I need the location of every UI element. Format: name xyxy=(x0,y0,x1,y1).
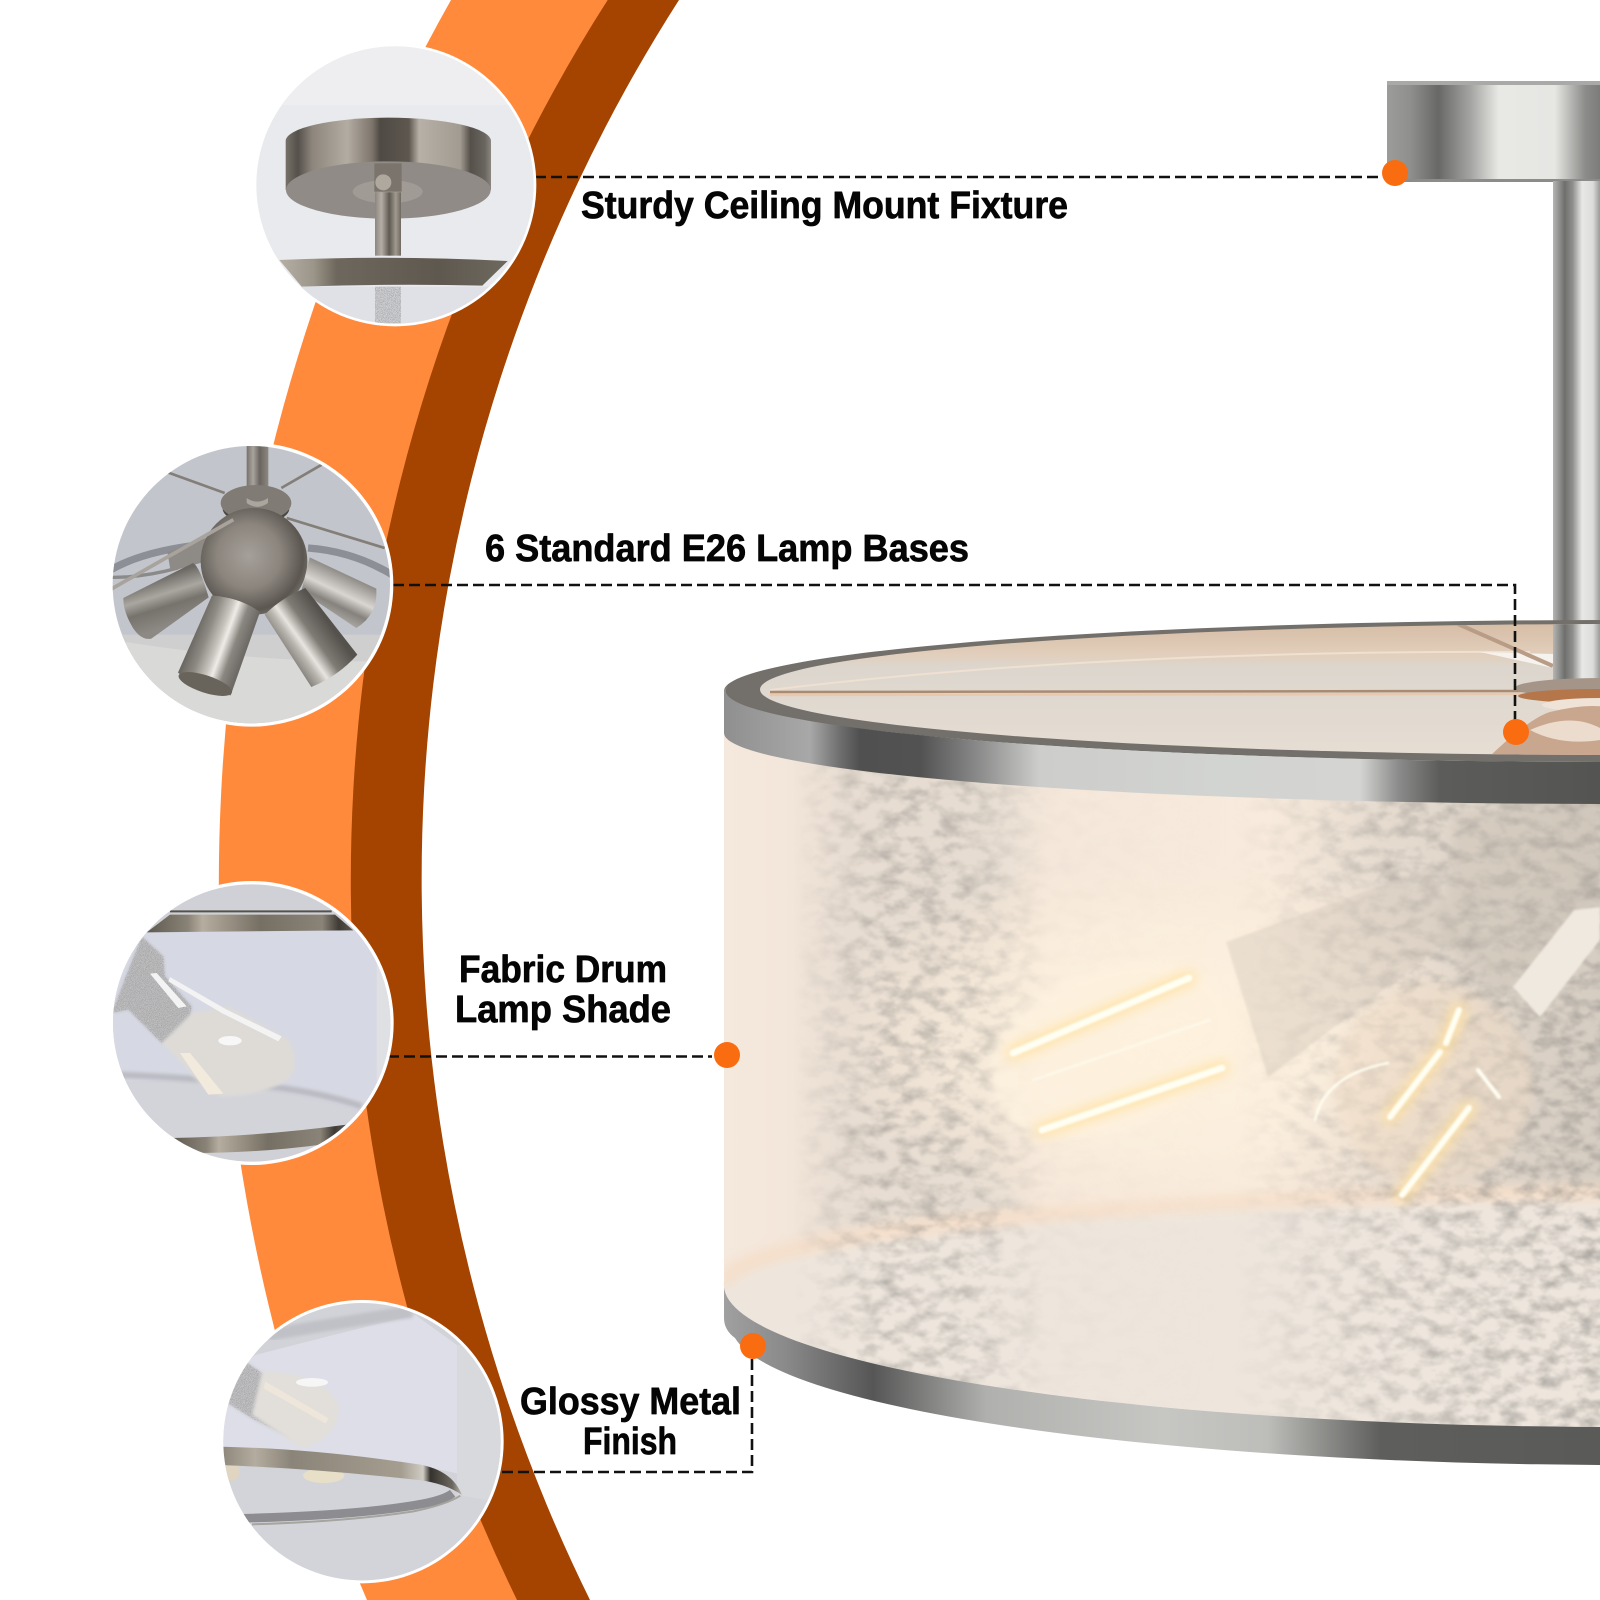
lamp stem xyxy=(1553,181,1600,681)
lamp socket 1 xyxy=(1226,890,1429,1076)
shade body xyxy=(102,930,378,1133)
top metal band xyxy=(724,686,1600,804)
speckle overlay xyxy=(112,936,192,1043)
lamp socket 2 xyxy=(1448,808,1596,986)
shade ring xyxy=(108,545,395,576)
callout line: fabric shade xyxy=(388,1055,712,1058)
bright fabric patch xyxy=(1513,907,1600,1017)
lamp shade rim interior xyxy=(724,620,1600,762)
stem xyxy=(375,192,401,256)
marker dot: fabric shade xyxy=(714,1042,740,1068)
label: fabric shade: Fabric Drum xyxy=(459,949,667,991)
marker dot: lamp bases xyxy=(1503,719,1529,745)
highlights xyxy=(150,973,282,1041)
fabric weave texture xyxy=(808,766,1600,1427)
front left socket xyxy=(178,595,260,695)
curved band: light orange xyxy=(219,0,608,1600)
bottom band xyxy=(172,1125,347,1153)
bulb xyxy=(162,1006,295,1096)
speckled sockets xyxy=(112,936,192,1043)
mounting knob xyxy=(374,163,402,192)
canopy side xyxy=(286,118,491,190)
inner disc below xyxy=(102,1081,368,1140)
bottom disc seen through fabric xyxy=(824,1198,1600,1427)
callout line: ceiling mount xyxy=(535,176,1381,178)
filaments glow xyxy=(1013,978,1469,1195)
spider wires xyxy=(167,465,385,548)
label: metal finish: Glossy Metal xyxy=(520,1381,741,1423)
label: ceiling mount: Sturdy Ceiling Mount Fixture xyxy=(581,185,1068,227)
callout line: metal finish xyxy=(502,1335,752,1472)
stem collar xyxy=(247,498,268,507)
shade body xyxy=(212,1315,457,1473)
metal band xyxy=(219,1447,462,1495)
fabric drum shade xyxy=(724,734,1600,1427)
label: metal finish xyxy=(520,1381,741,1463)
right socket xyxy=(301,557,376,628)
sphere hub xyxy=(201,508,307,615)
canopy mounting plate xyxy=(353,180,423,203)
detail circle: lamp bases xyxy=(112,444,394,727)
label: fabric shade xyxy=(455,949,671,1031)
label: metal finish: Finish xyxy=(583,1421,677,1463)
product image: ceiling lamp xyxy=(700,81,1600,1500)
left socket xyxy=(123,563,209,639)
detail circle: fabric shade xyxy=(113,881,394,1165)
marker dot: metal finish xyxy=(740,1333,766,1359)
detail circle: ceiling mount xyxy=(256,46,536,326)
marker dot: ceiling mount xyxy=(1382,160,1408,186)
bulb 2 xyxy=(1332,985,1532,1185)
shade band xyxy=(279,258,508,287)
label: lamp bases: 6 Standard E26 Lamp Bases xyxy=(485,528,969,570)
canopy underside xyxy=(286,161,491,219)
spider disc xyxy=(222,509,290,517)
front wire xyxy=(111,520,233,589)
bulb 1 xyxy=(988,1005,1045,1128)
label: fabric shade: Lamp Shade xyxy=(455,989,671,1031)
top band xyxy=(147,915,353,932)
stem xyxy=(246,446,268,486)
speckle overlay xyxy=(225,1362,292,1438)
bottom metal band xyxy=(724,1283,1600,1465)
curved band: dark orange xyxy=(351,0,679,1600)
front right socket xyxy=(265,588,357,687)
callout line: lamp bases xyxy=(393,585,1515,720)
bulb xyxy=(252,1372,339,1448)
detail circle: metal finish xyxy=(212,1292,512,1592)
socket xyxy=(225,1362,292,1438)
lower fabric xyxy=(212,1465,459,1592)
lamp canopy xyxy=(1387,81,1600,182)
bulb bases xyxy=(303,1468,344,1483)
fabric below band xyxy=(302,286,488,324)
back socket xyxy=(168,538,206,570)
filaments xyxy=(1013,978,1499,1195)
light glow xyxy=(908,935,1398,1146)
inner rim xyxy=(242,1493,453,1518)
